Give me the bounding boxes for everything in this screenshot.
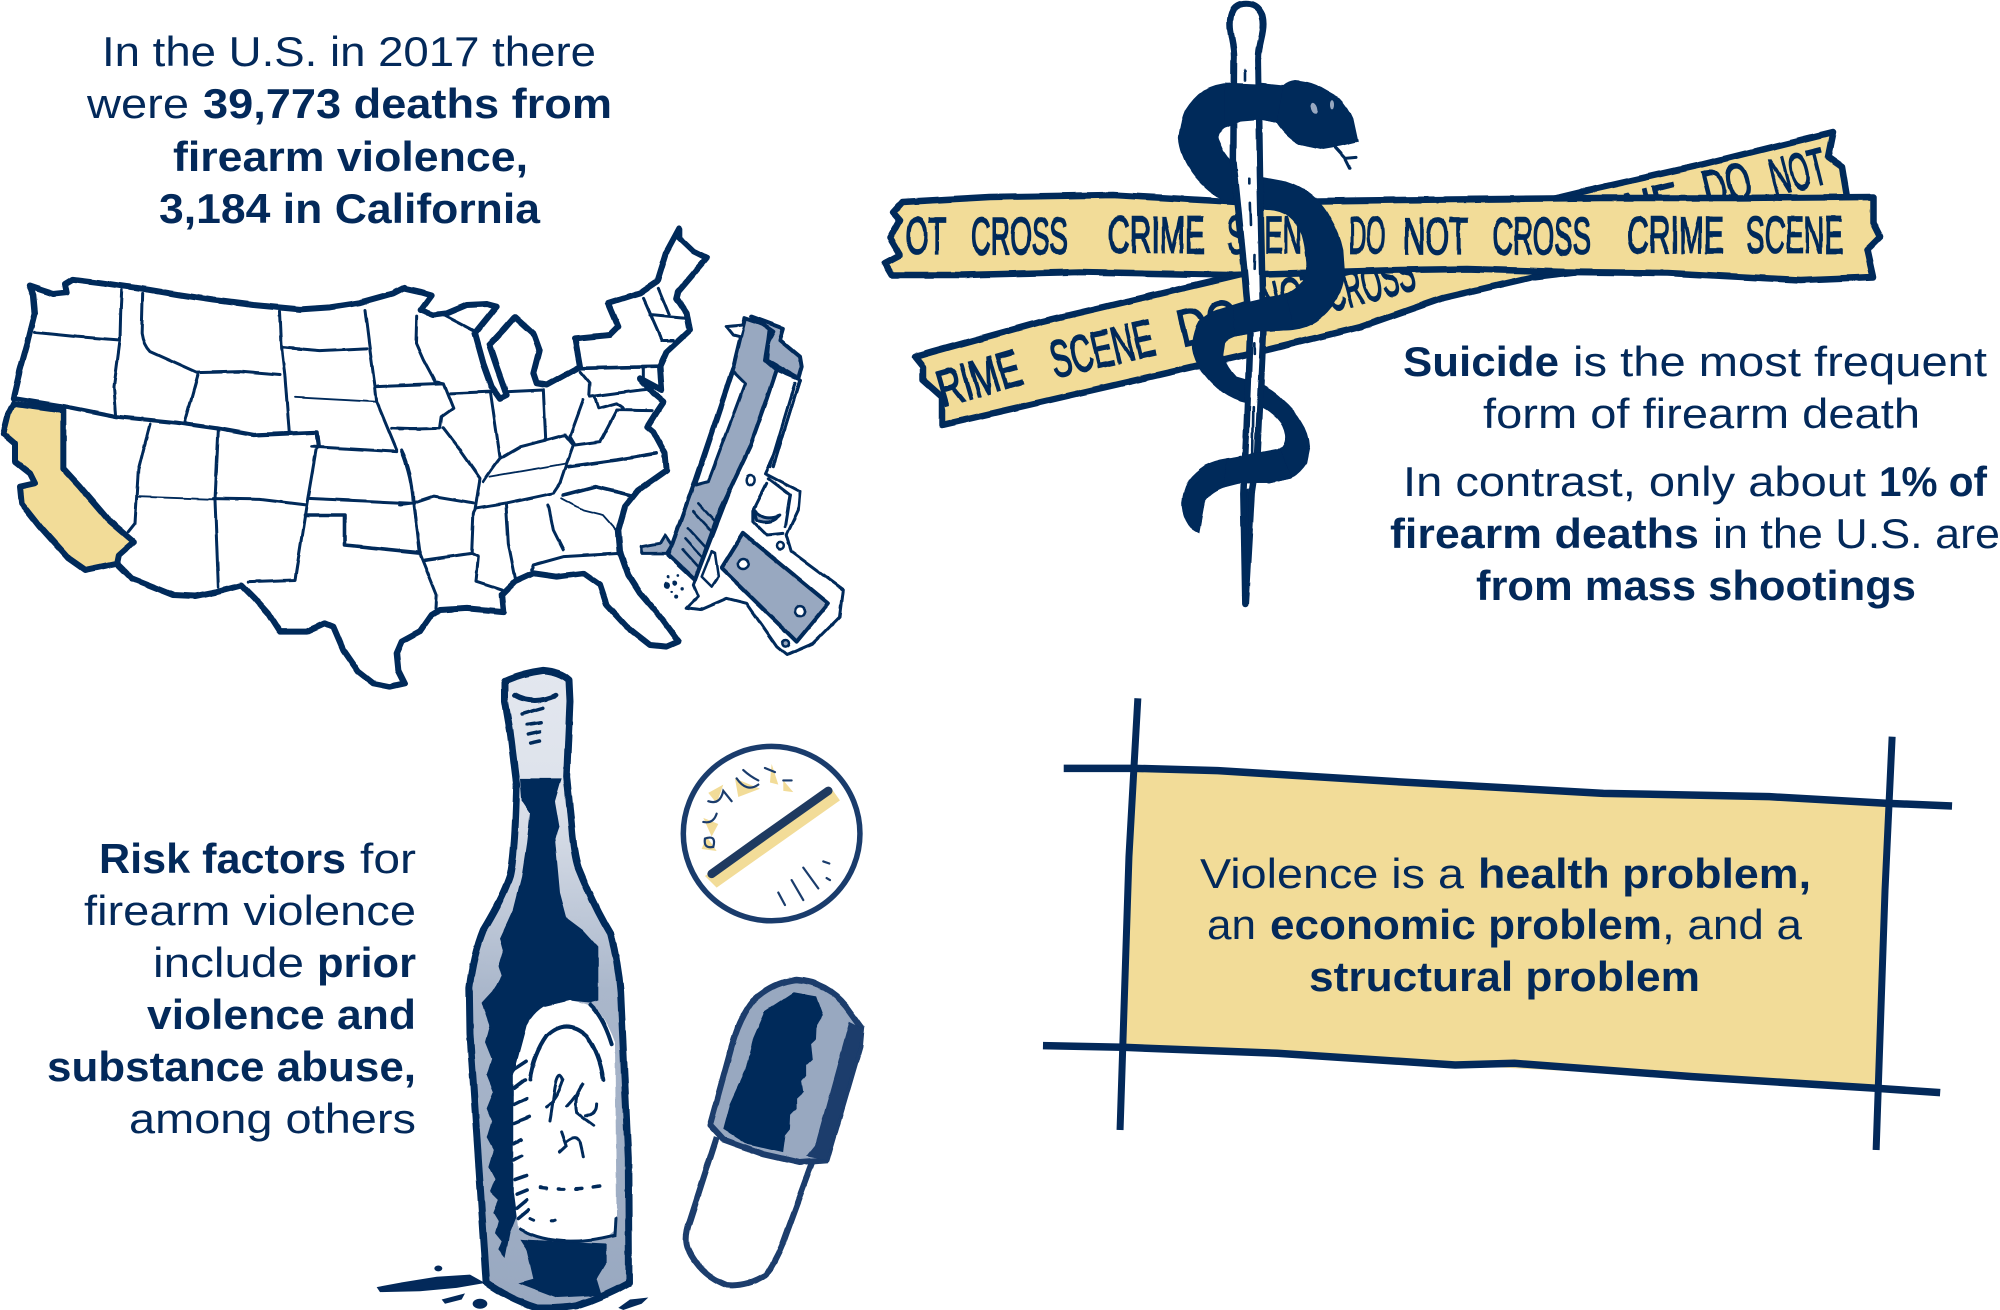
gun frame	[687, 370, 843, 655]
capsule upper half	[710, 980, 862, 1163]
text: suicide and mass shootings: from mass shootings	[1476, 562, 1916, 609]
pill score line	[705, 789, 840, 888]
diagonal tape lettering: SCENE	[1045, 310, 1160, 390]
text: suicide and mass shootings: Suicide	[1403, 338, 1559, 385]
horizontal tape lettering: SCENE	[1746, 207, 1843, 265]
bottle base liquid	[518, 1239, 607, 1297]
capsule shaded edge	[807, 1021, 862, 1160]
diagonal tape lettering: NOT	[1255, 262, 1326, 332]
horizontal tape lettering	[906, 207, 1843, 266]
text: suicide and mass shootings: is the most frequent	[1573, 338, 1988, 385]
pill yellow highlights	[702, 764, 793, 851]
text: national and California death counts	[86, 28, 612, 232]
snake eyes	[1309, 101, 1334, 115]
gun trigger	[754, 510, 779, 522]
icon: wine bottle	[469, 670, 629, 1308]
snake body	[1178, 80, 1358, 533]
text: national and California death counts: were	[86, 80, 189, 127]
box text: economic problem	[1270, 901, 1662, 948]
icon: round pill	[683, 746, 860, 921]
horizontal tape lettering: SCEN	[1227, 207, 1302, 265]
text: suicide and mass shootings: form of firearm death	[1483, 390, 1920, 437]
gun rear sight	[752, 317, 802, 378]
icon: spill under bottle	[377, 1266, 648, 1310]
panel: violence is a health problem	[1043, 698, 1952, 1150]
horizontal tape lettering: NOT	[1403, 208, 1468, 266]
horizontal tape lettering: CROSS	[971, 208, 1068, 266]
bottle body	[469, 670, 629, 1308]
text: risk factors: violence and	[147, 991, 416, 1038]
yellow box with hand-drawn frame	[1043, 698, 1952, 1150]
capsule dark patch	[723, 992, 823, 1152]
needle	[1230, 4, 1263, 604]
text: national and California death counts: 3,184 in California	[159, 185, 541, 232]
illustration: crime scene tape	[885, 132, 1880, 425]
text: suicide and mass shootings: in the U.S. are	[1713, 510, 2000, 557]
bottle liquid	[482, 778, 598, 1258]
text: risk factors: firearm violence	[84, 887, 416, 934]
gun inner rail	[770, 382, 799, 467]
snake bands over needle	[1223, 83, 1293, 488]
box text	[1200, 850, 1811, 1000]
box text: structural problem	[1309, 953, 1700, 1000]
gun grip	[722, 533, 828, 642]
pill engraving	[703, 768, 830, 905]
gun slide	[668, 318, 777, 580]
diagonal tape lettering: NE	[1619, 172, 1686, 242]
box text: health problem,	[1478, 850, 1811, 897]
text: risk factors: Risk factors	[99, 835, 346, 882]
gun debris	[663, 574, 684, 599]
icon: snake wrapped around a needle	[1178, 4, 1358, 604]
California highlighted	[3, 403, 133, 570]
gun front ear	[727, 325, 743, 337]
diagonal tape lettering	[930, 138, 1832, 419]
text: suicide and mass shootings	[1390, 338, 2000, 609]
snake tongue	[1335, 147, 1356, 168]
text: risk factors: prior	[317, 939, 416, 986]
text: risk factors: for	[360, 835, 416, 882]
text: suicide and mass shootings: firearm deaths	[1390, 510, 1699, 557]
text: suicide and mass shootings: In contrast, only about	[1403, 458, 1867, 505]
bottle label	[513, 1001, 617, 1241]
label arches and ticks	[514, 1005, 616, 1241]
horizontal tape lettering: OT	[906, 208, 946, 266]
diagonal tape lettering: DO	[1697, 152, 1757, 220]
box text: , and a	[1662, 901, 1803, 948]
eastern state borders	[400, 288, 687, 608]
gun slide slot	[696, 372, 745, 485]
horizontal tape lettering: DO	[1349, 207, 1385, 265]
horizontal tape lettering: CRIME	[1627, 207, 1724, 265]
capsule lower half	[686, 1138, 813, 1285]
text: national and California death counts: firearm violence,	[173, 133, 528, 180]
gun trigger guard	[753, 478, 790, 535]
diagonal tape lettering: CROSS	[1319, 244, 1421, 324]
text: risk factors: substance abuse,	[47, 1043, 416, 1090]
horizontal tape	[885, 195, 1880, 280]
needle shaft marks	[1245, 70, 1255, 533]
diagonal tape lettering: RIME	[930, 339, 1028, 419]
text: risk factors	[47, 835, 416, 1142]
eastern part of map	[400, 228, 707, 647]
map outline east	[405, 228, 707, 647]
pill disc	[683, 746, 860, 921]
western state borders	[15, 290, 420, 587]
map outline west	[13, 279, 420, 687]
gun muzzle	[642, 535, 672, 553]
illustration: map of the United States	[3, 228, 707, 687]
diagonal tape	[915, 132, 1847, 425]
box text: an	[1207, 901, 1256, 948]
box text: Violence is a	[1200, 850, 1465, 897]
text: risk factors: include	[153, 939, 304, 986]
bottle neck marks	[515, 695, 556, 743]
diagonal tape lettering: DO	[1172, 288, 1245, 359]
icon: capsule	[686, 980, 862, 1285]
gun screws and details	[702, 475, 805, 647]
horizontal tape lettering: CROSS	[1493, 208, 1591, 266]
text: suicide and mass shootings: 1% of	[1879, 458, 1987, 505]
gun serrations	[683, 503, 715, 567]
text: risk factors: among others	[129, 1095, 416, 1142]
diagonal tape lettering: NOT	[1764, 138, 1832, 208]
label script	[530, 1076, 603, 1222]
text: national and California death counts: 39,773 deaths from	[203, 80, 612, 127]
icon: handgun	[642, 317, 843, 655]
text: national and California death counts: In the U.S. in 2017 there	[102, 28, 596, 75]
horizontal tape lettering: CRIME	[1108, 207, 1205, 265]
